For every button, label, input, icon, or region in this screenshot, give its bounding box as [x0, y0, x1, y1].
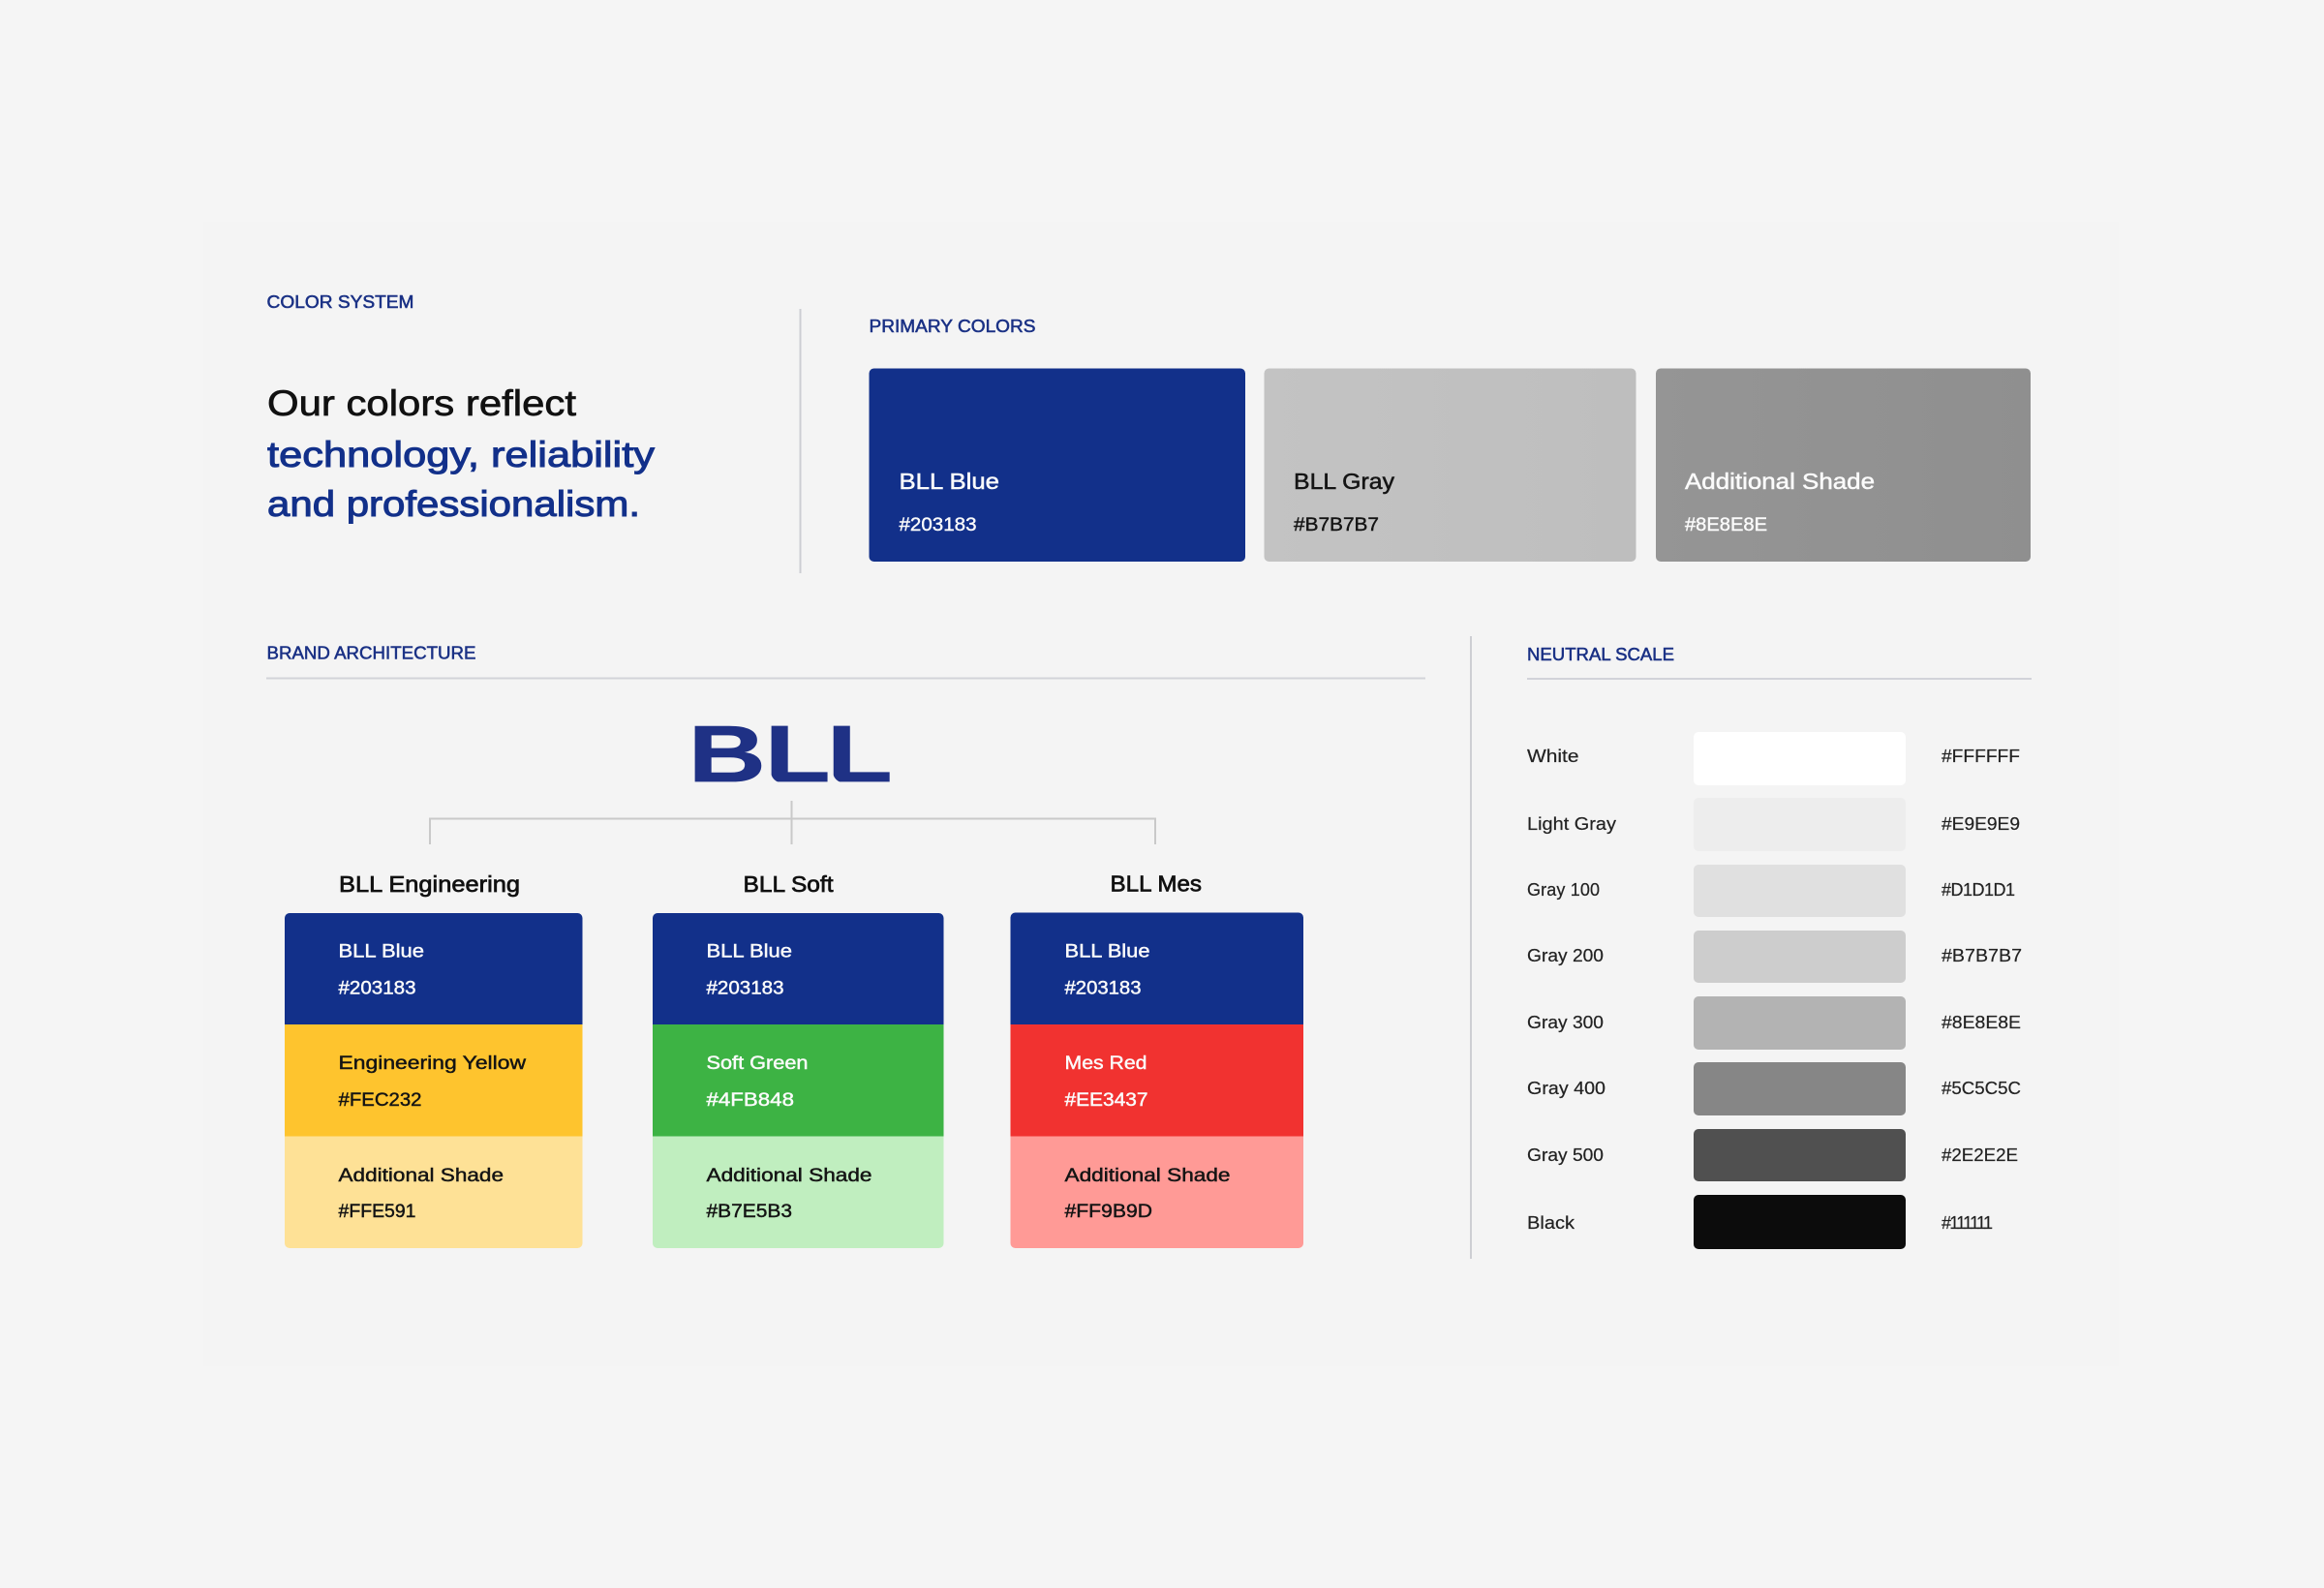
row: White: White	[1527, 747, 1578, 766]
row: Gray 400	[1527, 1062, 2021, 1115]
band: Soft Green: #4FB848	[707, 1090, 794, 1111]
column: BLL Engineering	[285, 871, 583, 1248]
eyebrow: brand architecture: BRAND ARCHITECTURE	[267, 643, 476, 662]
band: Mes Red: Mes Red	[1065, 1054, 1147, 1074]
row: Gray 400: #5C5C5C	[1942, 1079, 2021, 1098]
band: Additional Shade: Additional Shade	[339, 1166, 504, 1186]
band: BLL Blue: #203183	[707, 978, 784, 999]
band: Additional Shade: #B7E5B3	[707, 1202, 792, 1222]
band: Soft Green: Soft Green	[707, 1054, 808, 1074]
row: Gray 300: #8E8E8E	[1942, 1013, 2021, 1032]
hierarchy connector	[430, 801, 1155, 844]
swatch: Additional Shade: #8E8E8E	[1685, 515, 1767, 535]
band: BLL Blue: BLL Blue	[707, 941, 792, 962]
row: Light Gray: #E9E9E9	[1942, 814, 2020, 834]
band: BLL Blue	[285, 913, 583, 1024]
swatch: Additional Shade: Additional Shade	[1685, 469, 1875, 494]
heading	[267, 383, 656, 524]
column: BLL Soft	[653, 871, 943, 1248]
heading: technology, reliability	[267, 435, 656, 474]
heading: Our colors reflect	[267, 383, 577, 423]
band: Additional Shade: #FFE591	[339, 1202, 416, 1222]
logo: BLL: BLL	[688, 709, 893, 799]
row: Gray 200	[1527, 931, 2022, 983]
column: BLL Mes	[1011, 871, 1303, 1248]
band: BLL Blue: #203183	[1065, 978, 1141, 999]
band: Additional Shade: #FF9B9D	[1065, 1202, 1152, 1222]
band: Soft Green	[653, 1024, 943, 1137]
band: Engineering Yellow	[285, 1024, 583, 1137]
row: Gray 100	[1527, 865, 2015, 917]
swatch: BLL Gray: #B7B7B7	[1294, 515, 1379, 535]
band: Mes Red	[1011, 1024, 1303, 1137]
row: White: #FFFFFF	[1942, 747, 2020, 766]
column title: BLL Engineering	[339, 871, 520, 897]
row: Black: Black	[1527, 1213, 1575, 1233]
band: Additional Shade: Additional Shade	[1065, 1166, 1230, 1186]
row: Gray 500	[1527, 1129, 2018, 1181]
swatch: BLL Blue: BLL Blue	[899, 469, 999, 494]
row: Gray 200: Gray 200	[1527, 946, 1604, 965]
swatch: BLL Gray: BLL Gray	[1294, 469, 1395, 494]
band: Additional Shade	[653, 1137, 943, 1248]
row: Gray 100: Gray 100	[1527, 880, 1600, 900]
band: Mes Red: #EE3437	[1065, 1090, 1148, 1111]
band: Engineering Yellow: #FEC232	[339, 1090, 422, 1111]
heading: and professionalism.	[267, 484, 640, 524]
eyebrow: primary colors: PRIMARY COLORS	[870, 316, 1036, 336]
row: Gray 200: #B7B7B7	[1942, 946, 2022, 965]
swatch: BLL Blue	[870, 368, 1245, 562]
band: BLL Blue: BLL Blue	[1065, 941, 1150, 962]
row: Light Gray	[1527, 798, 2020, 851]
background panel	[203, 222, 2119, 1366]
band: BLL Blue: #203183	[339, 978, 416, 999]
column title: BLL Soft	[744, 871, 834, 897]
row: Gray 300: Gray 300	[1527, 1013, 1604, 1032]
row: White	[1527, 732, 2020, 785]
swatch: BLL Gray	[1265, 368, 1636, 562]
band: Additional Shade	[1011, 1137, 1303, 1248]
band: BLL Blue: BLL Blue	[339, 941, 424, 962]
band: BLL Blue	[1011, 912, 1303, 1024]
row: Gray 300	[1527, 996, 2021, 1050]
row: Black: #111111	[1942, 1213, 1993, 1233]
row: Light Gray: Light Gray	[1527, 814, 1616, 834]
band: Engineering Yellow: Engineering Yellow	[339, 1054, 526, 1074]
eyebrow: color system: COLOR SYSTEM	[267, 291, 414, 312]
band: Additional Shade	[285, 1137, 583, 1248]
row: Gray 500: #2E2E2E	[1942, 1145, 2018, 1165]
row: Black	[1527, 1195, 1993, 1249]
swatch: BLL Blue: #203183	[899, 515, 976, 535]
row: Gray 500: Gray 500	[1527, 1145, 1604, 1165]
panel: brand architecture	[266, 643, 1425, 1248]
eyebrow: neutral scale: NEUTRAL SCALE	[1527, 644, 1674, 664]
panel: color system intro	[267, 291, 656, 524]
row: Gray 400: Gray 400	[1527, 1079, 1605, 1098]
column title: BLL Mes	[1110, 871, 1202, 897]
band: Additional Shade: Additional Shade	[707, 1166, 872, 1186]
swatch: Additional Shade	[1656, 368, 2031, 562]
band: BLL Blue	[653, 913, 943, 1024]
row: Gray 100: #D1D1D1	[1942, 880, 2015, 900]
panel: primary colors	[870, 316, 2031, 562]
panel: neutral scale	[1527, 644, 2032, 1249]
